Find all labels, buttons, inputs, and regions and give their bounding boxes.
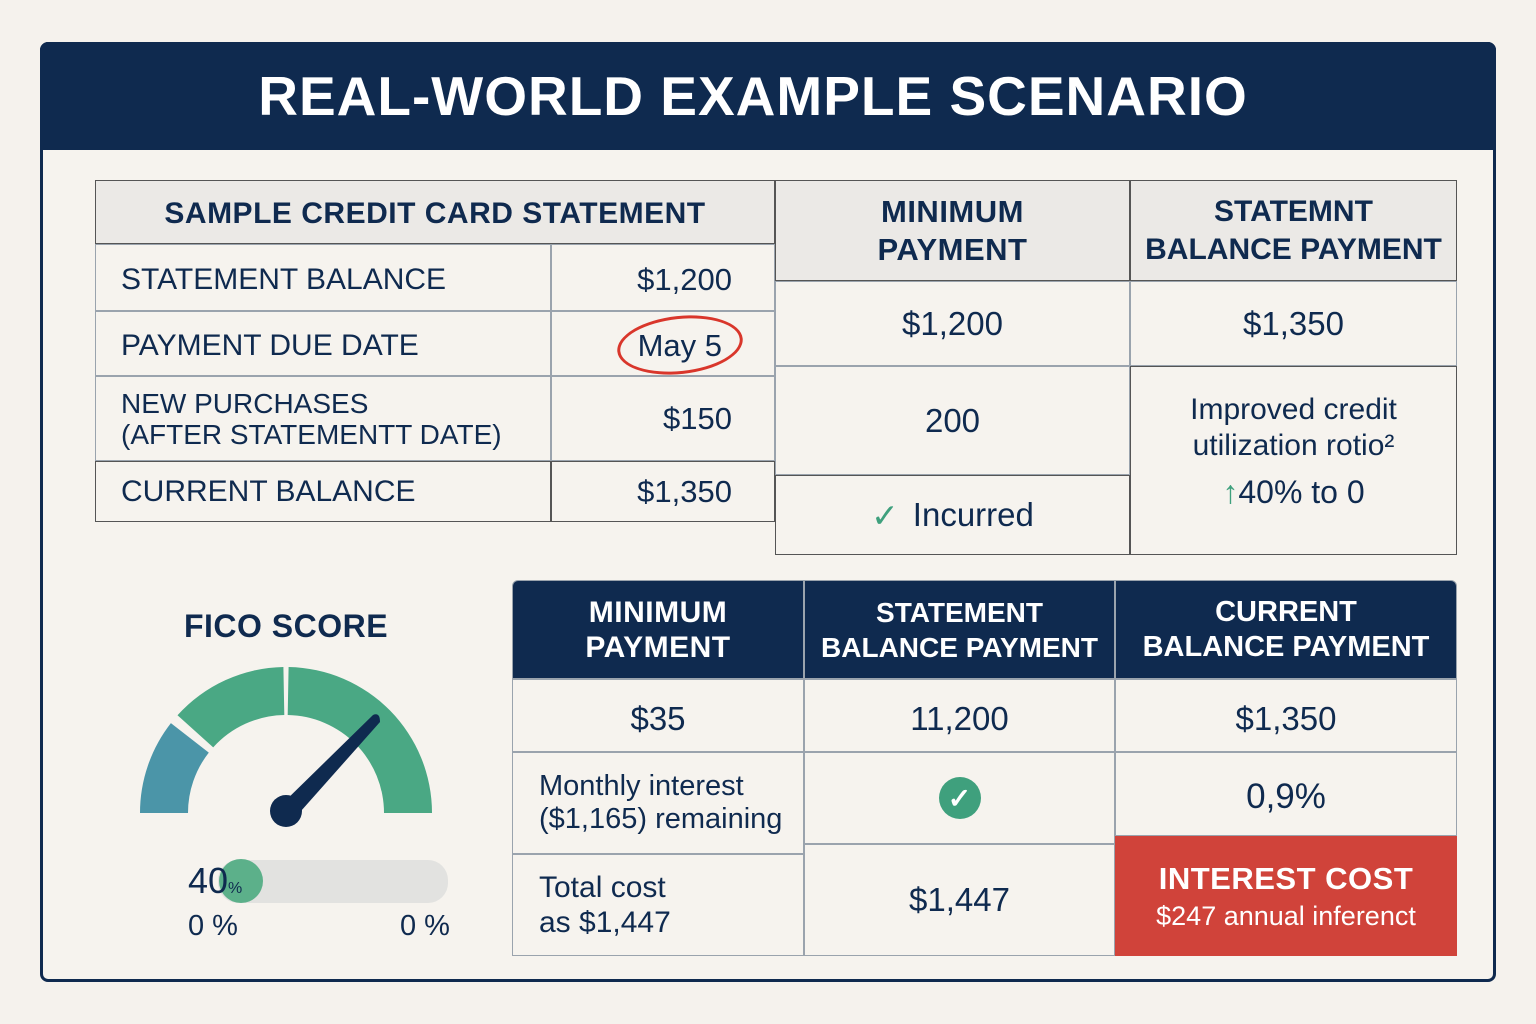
panel: sample statement table: $1,350 <box>637 474 732 508</box>
panel: bottom table: CURRENT <box>1215 596 1357 628</box>
panel: sample statement table <box>95 180 775 522</box>
panel: bottom table: BALANCE PAYMENT <box>821 632 1098 662</box>
icon: check <box>804 752 1115 844</box>
icon: check: ✓ <box>948 782 971 814</box>
title bar <box>40 42 1496 150</box>
headers: PAYMENT <box>585 630 731 664</box>
panel: bottom table: Monthly interest <box>539 770 744 802</box>
row: current balance: CURRENT BALANCE <box>121 474 416 508</box>
text: 40%: 40% <box>188 860 242 901</box>
panel: sample statement table: $1,200 <box>637 262 732 296</box>
incurred: Incurred <box>913 496 1034 533</box>
callout: interest cost <box>1115 836 1457 956</box>
header min <box>775 180 1130 281</box>
callout: red circle <box>614 310 746 380</box>
header statement <box>1130 180 1457 281</box>
panel: bottom table: $1,447 <box>909 881 1010 918</box>
row: due date <box>95 311 551 376</box>
panel: bottom table: 11,200 <box>910 700 1009 736</box>
row: current balance <box>95 461 551 522</box>
header statement: BALANCE PAYMENT <box>1145 232 1442 266</box>
chart: gauge <box>140 667 448 903</box>
utilization note: ↑40% to 0 <box>1222 474 1365 510</box>
gauge labels: 0 % <box>188 910 238 942</box>
panel: bottom table: BALANCE PAYMENT <box>1143 630 1429 662</box>
panel: comparison table top: 200 <box>925 402 980 438</box>
panel: bottom table: $1,350 <box>1236 700 1336 736</box>
header <box>95 180 775 244</box>
panel: comparison table top: $1,350 <box>1243 304 1344 342</box>
header statement: STATEMNT <box>1214 194 1373 228</box>
row: statement balance: STATEMENT BALANCE <box>121 262 446 296</box>
panel: bottom table: Total cost <box>539 871 666 904</box>
heading: fico: FICO SCORE <box>184 608 388 644</box>
row: statement balance <box>95 244 551 311</box>
row: due date: PAYMENT DUE DATE <box>121 328 419 362</box>
incurred: ✓ <box>871 496 899 534</box>
title bar: REAL-WORLD EXAMPLE SCENARIO <box>258 65 1248 127</box>
panel: comparison table top <box>775 180 1457 555</box>
panel: bottom table <box>512 580 1457 956</box>
panel: sample statement table: May 5 <box>638 328 722 362</box>
panel: bottom table: 0,9% <box>1246 777 1326 816</box>
incurred <box>775 475 1130 555</box>
panel: sample statement table: $150 <box>663 400 732 436</box>
header: SAMPLE CREDIT CARD STATEMENT <box>164 197 706 230</box>
row: new purchases <box>95 376 551 461</box>
utilization note: Improved credit <box>1190 392 1397 426</box>
panel: bottom table: STATEMENT <box>876 596 1043 628</box>
text: 0 % <box>400 910 450 942</box>
row: new purchases: (AFTER STATEMENTT DATE) <box>121 418 502 450</box>
row: new purchases: NEW PURCHASES <box>121 388 368 418</box>
panel: bottom table: $35 <box>630 700 686 736</box>
utilization note: utilization rotio² <box>1193 428 1394 462</box>
panel: comparison table top: $1,200 <box>902 304 1003 342</box>
callout: interest cost: INTEREST COST <box>1159 860 1413 896</box>
callout: interest cost: $247 annual inferenct <box>1156 900 1416 930</box>
panel: bottom table: as $1,447 <box>539 906 671 939</box>
header min: PAYMENT <box>878 232 1027 266</box>
headers <box>512 580 804 679</box>
headers: MINIMUM <box>589 596 727 628</box>
header min: MINIMUM <box>881 194 1024 228</box>
progress bar <box>218 860 448 903</box>
utilization note <box>1130 366 1457 555</box>
panel: bottom table: ($1,165) remaining <box>539 803 782 835</box>
